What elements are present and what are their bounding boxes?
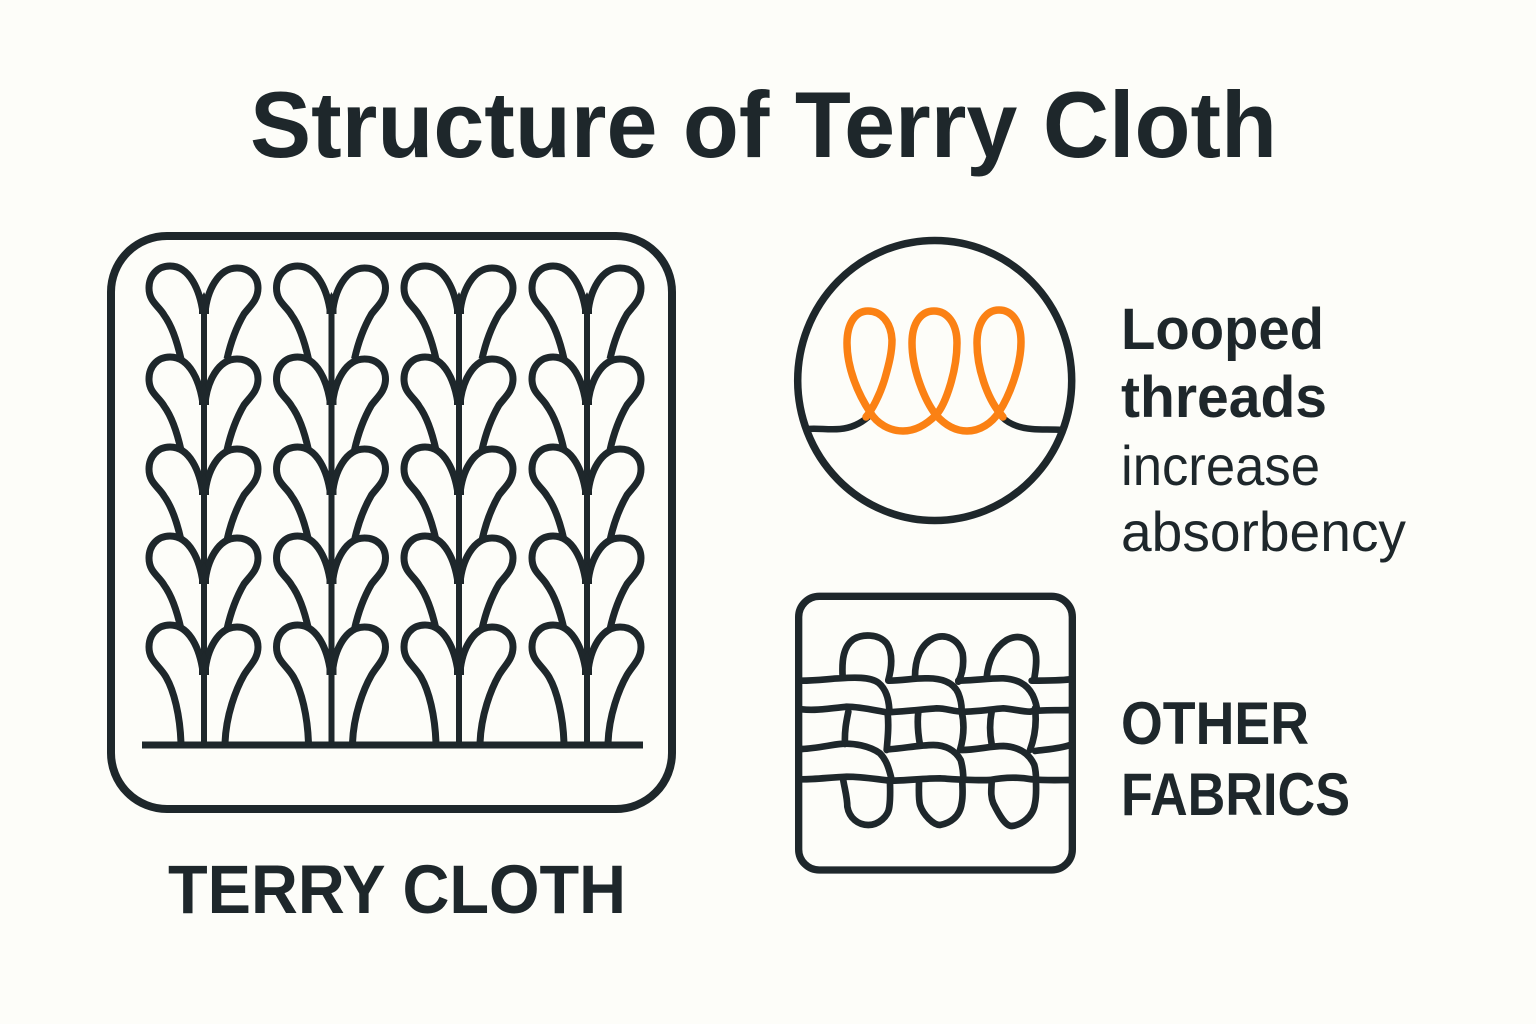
label: other fabrics xyxy=(1121,690,1350,828)
horizontal thread 2 xyxy=(802,707,1070,712)
label line: other: OTHER xyxy=(1121,690,1309,757)
label: terry cloth: TERRY CLOTH xyxy=(168,851,626,928)
horizontal thread 1 xyxy=(802,678,1070,710)
regular line: absorbency: absorbency xyxy=(1121,500,1406,563)
callout text: looped threads xyxy=(1121,297,1406,563)
title: Structure of Terry Cloth xyxy=(250,72,1277,177)
loop column 1 xyxy=(149,266,258,745)
icon: looped threads circle xyxy=(798,240,1072,520)
loop column 3 xyxy=(404,266,513,745)
dark base thread xyxy=(807,417,1062,430)
horizontal thread 3 xyxy=(802,744,1070,780)
panel: terry cloth diagram xyxy=(111,236,672,809)
loop column 2 xyxy=(276,266,386,745)
panel frame xyxy=(111,236,672,809)
bold line: threads: threads xyxy=(1121,365,1327,430)
icon: other fabrics woven panel xyxy=(799,596,1072,870)
loop column 4 xyxy=(532,266,641,745)
bottom loops xyxy=(843,781,1036,826)
panel frame xyxy=(799,596,1072,870)
top loops xyxy=(842,636,1036,682)
circle outline xyxy=(798,240,1072,520)
orange loops xyxy=(847,310,1021,431)
vertical threads xyxy=(845,708,1036,750)
horizontal thread 4 xyxy=(802,777,1070,781)
bold line: looped: Looped xyxy=(1121,297,1324,362)
regular line: increase: increase xyxy=(1121,434,1320,497)
label line: fabrics: FABRICS xyxy=(1121,761,1350,828)
base line xyxy=(142,742,643,748)
